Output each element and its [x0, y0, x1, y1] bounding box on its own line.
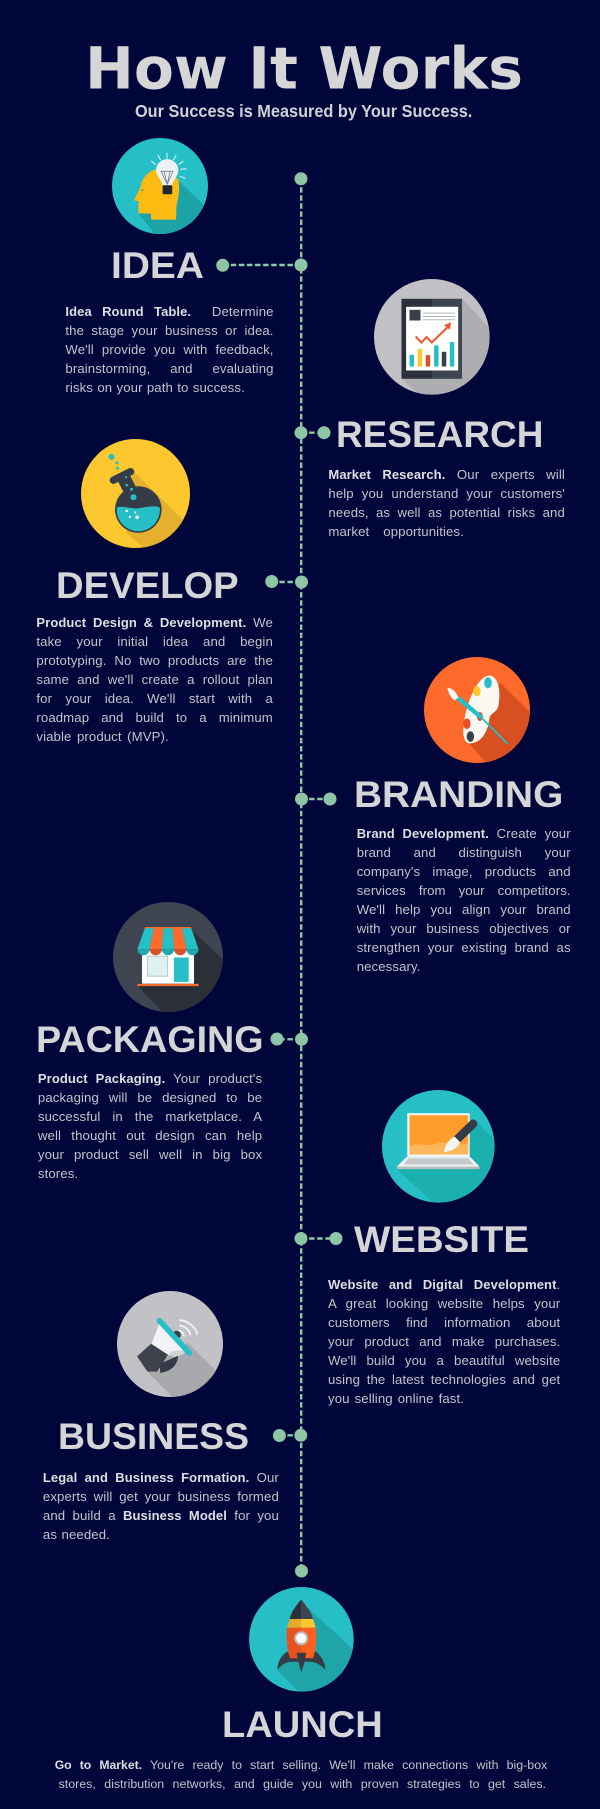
panel: website [328, 1090, 560, 1406]
text: branding description: necessary. [357, 959, 420, 974]
text: branding description: brand and distinguish your [357, 845, 571, 860]
text: packaging description: stores. [38, 1166, 78, 1181]
text: business description: experts will get your business formed [43, 1489, 279, 1504]
text: develop description: same and we'll create a rollout plan [36, 672, 273, 687]
icon: rocket [249, 1587, 354, 1692]
icon: storefront [113, 902, 223, 1012]
text: packaging description: packaging will be designed to be [38, 1090, 262, 1105]
text: website description: customers find information about [328, 1315, 560, 1330]
text: research description: help you understand your customers' [328, 486, 565, 501]
heading: business: BUSINESS [58, 1416, 249, 1457]
text: launch description: Go to Market. You're ready to start selling. We'll make connections with big-box [55, 1758, 547, 1772]
panel: branding [354, 657, 571, 974]
text: website description: A great looking website helps your [328, 1296, 560, 1311]
text: research description: market opportunities. [328, 524, 464, 539]
text: branding description: strengthen your existing brand as [357, 940, 571, 955]
icon: megaphone [117, 1291, 223, 1397]
heading: idea: IDEA [111, 245, 204, 286]
text: branding description: Brand Development. Create your [357, 826, 571, 841]
text: research description [328, 467, 565, 539]
text: idea description [65, 304, 274, 395]
text: develop description: for your idea. We'll start with a [36, 691, 273, 706]
text: branding description: with your business objectives or [357, 921, 571, 936]
text: branding description [356, 826, 571, 974]
heading: research: RESEARCH [336, 414, 543, 455]
heading: branding: BRANDING [354, 774, 563, 815]
icon: flask [81, 439, 190, 548]
icon: laptop with brush [382, 1090, 495, 1203]
panel: business [43, 1291, 279, 1542]
title: How It Works [85, 36, 523, 102]
text: idea description: risks on your path to success. [65, 380, 245, 395]
icon: paint palette and brush [424, 657, 530, 763]
icon: tablet with charts [374, 279, 490, 395]
text: idea description: brainstorming, and evaluating [65, 361, 274, 376]
text: develop description [36, 615, 273, 744]
text: idea description: Idea Round Table. Determine [65, 304, 274, 319]
text: business description: as needed. [43, 1527, 110, 1542]
text: develop description: Product Design & Development. We [36, 615, 273, 630]
text: packaging description: well thought out design can help [38, 1128, 262, 1143]
heading: website: WEBSITE [354, 1219, 529, 1260]
panel: launch [55, 1587, 548, 1791]
text: branding description: services from your competitors. [357, 883, 571, 898]
text: develop description: prototyping. No two products are the [36, 653, 273, 668]
heading: launch: LAUNCH [222, 1704, 383, 1745]
panel: research [328, 279, 565, 539]
text: business description [43, 1470, 279, 1542]
text: packaging description: Product Packaging. Your product's [38, 1071, 262, 1086]
icon: head with light bulb [112, 138, 208, 234]
text: packaging description [38, 1071, 262, 1181]
text: business description: Legal and Business Formation. Our [43, 1470, 279, 1485]
panel: idea [65, 138, 274, 395]
heading: develop: DEVELOP [56, 565, 239, 606]
text: website description [328, 1277, 560, 1406]
text: branding description: company's image, products and [357, 864, 571, 879]
text: website description: your product and make purchases. [328, 1334, 560, 1349]
subtitle: Our Success is Measured by Your Success. [135, 101, 472, 121]
panel: packaging [36, 902, 264, 1181]
text: launch description: stores, distribution networks, and guide you with proven strategies to get sales. [59, 1777, 546, 1791]
text: launch description [55, 1758, 548, 1791]
text: research description: needs, as well as potential risks and [328, 505, 565, 520]
text: website description: using the latest technologies and get [328, 1372, 560, 1387]
text: develop description: viable product (MVP). [36, 729, 169, 744]
text: idea description: the stage your business or idea. [65, 323, 274, 338]
text: idea description: We'll provide you with feedback, [65, 342, 274, 357]
text: packaging description: successful in the marketplace. A [38, 1109, 262, 1124]
heading: packaging: PACKAGING [36, 1019, 264, 1060]
text: packaging description: your product sell well in big box [38, 1147, 262, 1162]
text: business description: and build a Business Model for you [43, 1508, 279, 1523]
text: research description: Market Research. Our experts will [328, 467, 565, 482]
text: develop description: roadmap and build to a minimum [36, 710, 273, 725]
text: website description: We'll build you a beautiful website [328, 1353, 560, 1368]
text: branding description: We'll help you align your brand [357, 902, 571, 917]
panel: develop [36, 439, 273, 744]
text: website description: you selling online fast. [328, 1391, 464, 1406]
text: develop description: take your initial idea and begin [36, 634, 273, 649]
text: website description: Website and Digital Development. [328, 1277, 560, 1292]
